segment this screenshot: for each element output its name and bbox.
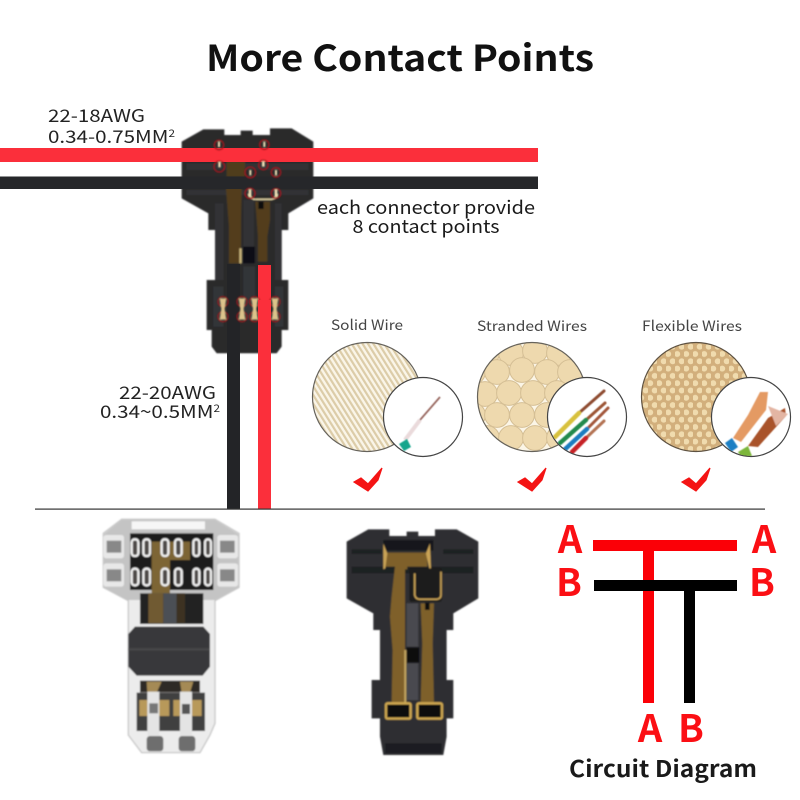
heading: Solid Wire — [331, 315, 403, 335]
panel: flexible wires — [642, 316, 790, 491]
end cap — [385, 743, 442, 753]
heading: Stranded Wires — [477, 316, 587, 336]
side windows — [103, 535, 238, 587]
cross section — [642, 342, 750, 452]
red vertical wire — [258, 265, 271, 509]
wire photo circle — [548, 378, 626, 456]
brass branch strip — [421, 603, 434, 703]
lower interior — [140, 681, 200, 692]
label: main wire gauge — [48, 103, 176, 149]
letters: B — [678, 698, 704, 753]
heading: Flexible Wires — [642, 316, 742, 336]
letters: B — [556, 552, 582, 607]
dark band — [128, 627, 210, 676]
callout: contact points: 8 contact points — [352, 213, 500, 239]
label: main wire gauge: 0.34-0.75MM — [48, 124, 150, 149]
main connector with wires — [0, 128, 538, 509]
brass common strip — [384, 553, 427, 703]
black vertical wire — [227, 264, 240, 509]
black horizontal wire — [0, 176, 538, 189]
circuit diagram — [556, 509, 777, 784]
panel: solid wire — [312, 315, 462, 491]
label: branch wire gauge — [100, 380, 221, 424]
red wire over lower contacts — [258, 300, 271, 330]
black connector — [347, 529, 478, 755]
check mark — [518, 468, 546, 491]
label: branch wire gauge: 2 — [213, 400, 221, 415]
label: branch wire gauge: 0.34~0.5MM — [100, 399, 196, 424]
cross section — [312, 342, 422, 452]
brass strips — [227, 162, 245, 177]
check mark — [682, 468, 710, 491]
callout: contact points — [317, 194, 535, 239]
letters: A — [751, 509, 777, 564]
caption: Circuit Diagram — [569, 750, 757, 784]
callout: contact points: each connector provide — [317, 194, 535, 220]
label: branch wire gauge: 22-20AWG — [119, 380, 216, 405]
label: main wire gauge: 22-18AWG — [48, 103, 145, 128]
divider line — [35, 508, 765, 510]
brass clip — [415, 572, 441, 599]
letters: A — [637, 698, 663, 753]
black line B — [594, 580, 737, 703]
title: More Contact Points — [206, 30, 594, 82]
panel: stranded wires — [476, 320, 628, 492]
connector body — [182, 128, 313, 353]
transparent connector — [103, 519, 239, 753]
clear housing — [103, 519, 239, 753]
housing — [347, 529, 478, 755]
letters — [556, 509, 777, 753]
red line A — [593, 540, 737, 703]
brass loops — [386, 703, 411, 719]
bottom ports — [147, 736, 163, 751]
check mark — [354, 468, 382, 491]
upper interior — [130, 533, 213, 590]
wire photo circle — [384, 378, 462, 456]
cross section — [476, 342, 584, 452]
letters: B — [749, 552, 775, 607]
label: main wire gauge: 2 — [168, 125, 176, 140]
letters: A — [557, 509, 583, 564]
mid interior — [140, 593, 203, 624]
contact point markers — [214, 140, 281, 322]
wire photo circle — [712, 378, 790, 458]
red horizontal wire — [0, 148, 538, 162]
